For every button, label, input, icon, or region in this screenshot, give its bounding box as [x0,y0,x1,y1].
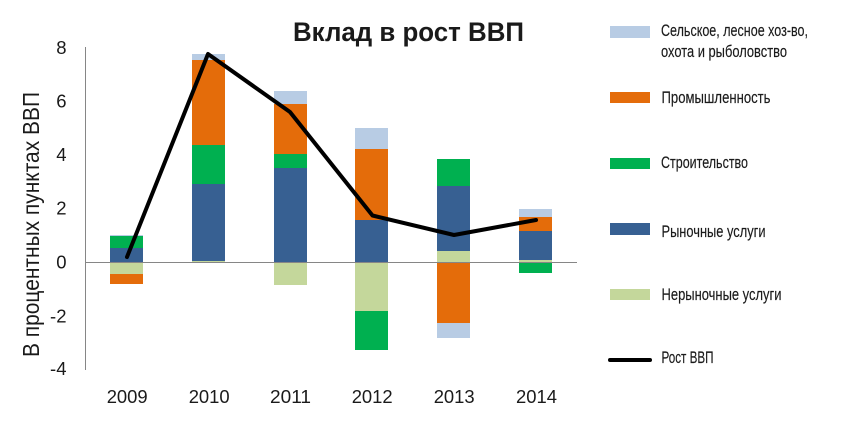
y axis tick labels: 2 [56,198,66,218]
legend: industry [610,89,770,107]
legend: market services: Рыночные услуги [662,223,766,241]
zero baseline [85,262,577,264]
legend: construction [610,154,748,172]
bars 2013 [437,159,470,338]
legend: agriculture: охота и рыболовство [661,43,787,61]
x axis year labels: 2011 [270,386,311,407]
legend: GDP growth [610,349,714,367]
y axis tick labels: -4 [50,358,66,379]
legend: GDP growth: Рост ВВП [662,349,714,367]
y axis title: В процентных пунктах ВВП [18,92,44,357]
legend: non-market services: Нерыночные услуги [662,286,782,304]
y axis line [84,47,86,370]
x axis year labels: 2010 [189,386,230,407]
y axis tick labels: 8 [56,37,66,58]
legend: agriculture: Сельское, лесное хоз-во, [661,22,808,40]
y axis tick labels: 0 [56,252,66,272]
x axis year labels: 2013 [434,386,475,407]
y axis tick labels: 6 [56,90,66,112]
bars 2009 [110,235,143,284]
x axis year labels: 2009 [107,386,148,407]
legend: non-market services [610,286,782,304]
title: Вклад в рост ВВП [293,17,524,47]
bars 2010 [192,54,225,262]
y axis tick labels [50,37,66,379]
y axis tick labels: -2 [50,306,66,326]
legend: agriculture [610,22,808,61]
bars 2014 [519,209,552,273]
x axis year labels: 2014 [516,386,557,407]
legend: market services [610,223,766,241]
x axis year labels [107,386,557,407]
GDP growth line [127,54,536,257]
y axis tick labels: 4 [56,144,66,165]
x axis year labels: 2012 [352,386,393,407]
bars 2012 [355,128,388,350]
legend: construction: Строительство [661,154,748,172]
stacked bars [110,54,552,350]
legend: industry: Промышленность [662,89,770,107]
bars 2011 [274,91,307,285]
legend [610,22,808,367]
